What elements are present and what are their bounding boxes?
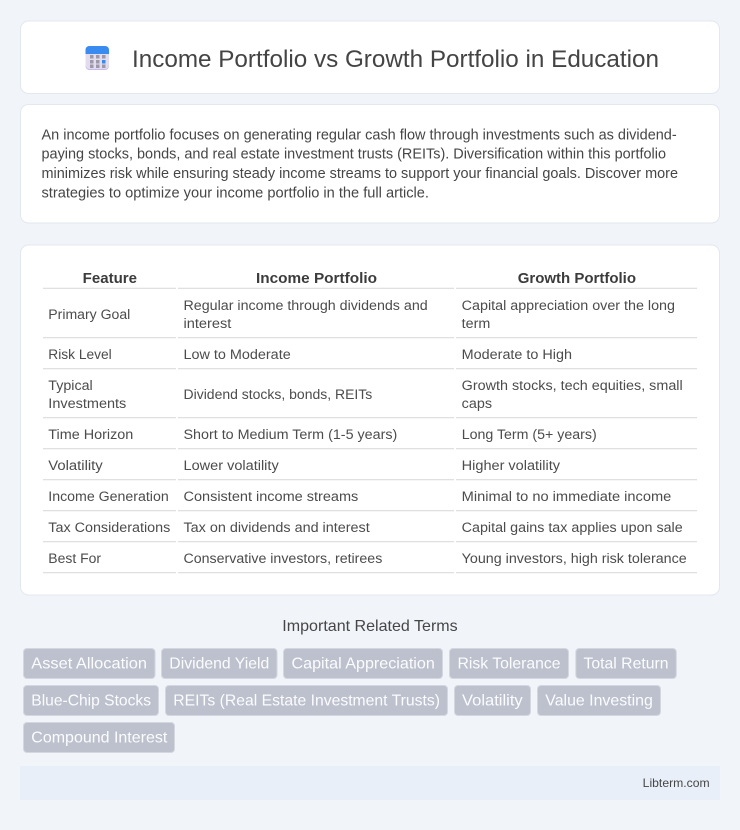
row: Income Generation: Minimal to no immediate income	[462, 489, 671, 505]
row: Tax Considerations: Tax on dividends and interest	[184, 520, 370, 536]
row: Tax Considerations	[48, 520, 683, 536]
panel: header	[20, 21, 720, 94]
tag: Blue-Chip Stocks: Blue-Chip Stocks	[31, 693, 151, 710]
related terms tags	[24, 648, 676, 752]
row: Income Generation	[48, 489, 671, 505]
tag: Volatility	[454, 686, 530, 716]
row: Risk Level: Risk Level	[48, 347, 112, 363]
tag: Risk Tolerance	[450, 648, 568, 678]
tag: Dividend Yield	[162, 648, 277, 678]
tag: Compound Interest: Compound Interest	[31, 730, 168, 747]
tag: Dividend Yield: Dividend Yield	[169, 656, 269, 673]
tag: Capital Appreciation	[284, 648, 442, 678]
related terms heading: Important Related Terms	[282, 618, 458, 635]
row: Volatility	[48, 458, 561, 474]
tag: Value Investing	[538, 686, 660, 716]
tag: Asset Allocation: Asset Allocation	[31, 656, 147, 673]
row: Primary Goal: Capital appreciation over the long	[462, 298, 675, 314]
table header row: Feature	[83, 270, 137, 287]
row: Volatility: Volatility	[48, 458, 104, 474]
table header row: Income Portfolio	[256, 270, 377, 287]
tag: REITs: REITs (Real Estate Investment Trusts)	[173, 693, 440, 710]
intro text: paying stocks, bonds, and real estate investment trusts (REITs). Diversification within this portfolio	[42, 146, 666, 162]
row: Primary Goal: term	[462, 316, 490, 332]
row: Primary Goal: Primary Goal	[48, 307, 130, 323]
intro text: minimizes risk while ensuring steady income streams to support your financial goals. Discover more	[42, 166, 678, 182]
table header row	[83, 270, 636, 287]
panel: comparison table	[20, 245, 720, 595]
tag: Total Return	[576, 648, 676, 678]
tag: Risk Tolerance: Risk Tolerance	[458, 656, 560, 673]
row: Time Horizon: Time Horizon	[48, 427, 133, 443]
row: Volatility: Higher volatility	[462, 458, 561, 474]
row: Time Horizon: Short to Medium Term (1-5 years)	[184, 427, 397, 443]
tag: REITs	[166, 686, 448, 716]
row: Time Horizon	[48, 427, 597, 443]
row: Tax Considerations: Capital gains tax applies upon sale	[462, 520, 683, 536]
row: Typical Investments	[48, 378, 683, 412]
row: Risk Level: Moderate to High	[462, 347, 572, 363]
row: Risk Level	[48, 347, 572, 363]
tag: Blue-Chip Stocks	[24, 686, 158, 716]
intro text: An income portfolio focuses on generating regular cash flow through investments such as dividend-	[42, 127, 677, 143]
tag: Total Return: Total Return	[584, 656, 668, 673]
row: Typical Investments: Investments	[48, 396, 126, 412]
row: Typical Investments: Typical	[48, 378, 93, 394]
icon: calendar	[86, 46, 109, 70]
tag: Compound Interest	[24, 722, 174, 752]
footer	[20, 766, 720, 800]
row: Typical Investments: Dividend stocks, bonds, REITs	[184, 387, 372, 403]
intro text: strategies to optimize your income portfolio in the full article.	[42, 185, 429, 201]
tag: Capital Appreciation: Capital Appreciation	[292, 656, 435, 673]
row: Typical Investments: caps	[462, 396, 492, 412]
row: Best For: Young investors, high risk tolerance	[462, 551, 687, 567]
panel: intro paragraph	[20, 104, 720, 223]
row: Income Generation: Income Generation	[48, 489, 169, 505]
row: Best For: Conservative investors, retirees	[184, 551, 382, 567]
title: Income Portfolio vs Growth Portfolio in Education	[132, 46, 659, 73]
tag: Volatility: Volatility	[462, 693, 523, 710]
tag: Asset Allocation	[24, 648, 155, 678]
row: Primary Goal: Regular income through dividends and	[184, 298, 428, 314]
row: Tax Considerations: Tax Considerations	[48, 520, 170, 536]
footer credit: Libterm.com	[643, 776, 710, 790]
row: Primary Goal: interest	[184, 316, 231, 332]
table header row: Growth Portfolio	[518, 270, 636, 287]
row: Income Generation: Consistent income streams	[184, 489, 358, 505]
row: Typical Investments: Growth stocks, tech equities, small	[462, 378, 683, 394]
row: Volatility: Lower volatility	[184, 458, 280, 474]
row: Time Horizon: Long Term (5+ years)	[462, 427, 597, 443]
tag: Value Investing: Value Investing	[545, 693, 653, 710]
row: Primary Goal	[48, 298, 675, 332]
row: Best For: Best For	[48, 551, 101, 567]
row: Best For	[48, 551, 687, 567]
row: Risk Level: Low to Moderate	[184, 347, 291, 363]
intro text	[42, 127, 678, 201]
